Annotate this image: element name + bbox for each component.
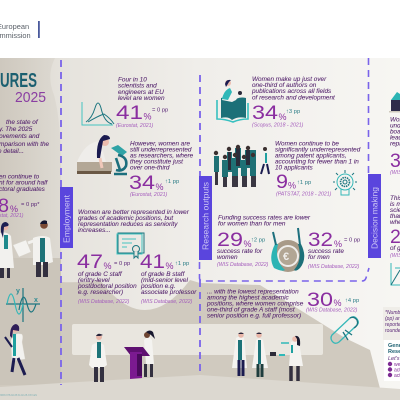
block: success rate men: success rate [308, 248, 344, 255]
block: authors: (Scopus, 2018 - 2021) [252, 122, 304, 128]
block: researchers one-third: (Eurostat, 2021) [130, 192, 167, 198]
block: grade C staff: % [104, 261, 112, 271]
block: grade A statistic: % [334, 298, 342, 308]
tab: Decision making: Decision making [370, 187, 380, 249]
block: success rate men: 32 [308, 229, 333, 251]
block: success rate men: % [334, 239, 342, 249]
icon: light bulb with gear [333, 170, 357, 195]
icon: certificate [117, 233, 144, 258]
block: researchers one-third: they constitute just [130, 158, 183, 166]
block: four in 10 scientists: Four in 10 [118, 76, 147, 84]
block: authors: % [278, 112, 287, 122]
icon: diploma [331, 317, 358, 343]
block: funding intro: for women than for men [218, 220, 286, 228]
block: seniority intro: representation reduces as seniority [78, 221, 178, 228]
block: grade C staff: (WIS Database, 2022) [78, 299, 130, 305]
block: grade B staff: of grade B staff [141, 271, 186, 278]
tab: Research outputs [199, 176, 212, 260]
block: success rate women: (WIS Database, 2022) [217, 262, 269, 268]
block: four in 10 scientists: (Eurostat, 2021) [116, 123, 153, 129]
block: four in 10 scientists: = 0 pp [152, 108, 168, 114]
contact box: Let's [388, 356, 400, 362]
icon: sine graph: x [34, 297, 38, 304]
block: funding intro [218, 214, 311, 228]
block: grade B staff [140, 251, 197, 305]
block: success rate men [308, 229, 360, 270]
block: patents [275, 140, 361, 198]
block: success rate men: for men [308, 254, 330, 261]
illustration: woman with tablet [5, 324, 25, 375]
dashed frame: employment [61, 60, 200, 385]
statistic: doctoral graduates: nt for around half [0, 180, 49, 186]
title [0, 70, 46, 106]
block: authors: publications across all fields [251, 88, 332, 95]
dashed frame: research outputs [200, 58, 369, 281]
tab: Research outputs: Research outputs [202, 182, 210, 250]
illustration: group of researchers [214, 145, 270, 187]
block: researchers one-third: % [156, 182, 164, 192]
block: seniority intro [78, 209, 190, 234]
block: grade B staff: % [166, 261, 174, 271]
icon: woman with book [217, 80, 248, 122]
statistic: doctoral graduates: ctoral graduates [0, 186, 46, 193]
block: grade C staff: 47 [77, 251, 103, 273]
block: grade B staff: (WIS Database, 2022) [141, 299, 193, 305]
block: patents: 9 [276, 171, 288, 193]
block: grade A statistic: (WIS Database, 2022) [306, 308, 358, 314]
block: patents: among patent applicants, [275, 152, 347, 160]
block: success rate women: % [244, 239, 252, 249]
catalogue number: ISBN 978-92-68 KI-02-25-XXX-EN [0, 393, 37, 397]
block: researchers one-third: over one-third [130, 164, 170, 172]
block: grade C staff: e.g. researcher) [78, 289, 123, 296]
block: grade A staff text: positions, where women comprise [206, 300, 304, 308]
block: researchers one-third [129, 140, 194, 198]
illustration: man in lab coat [89, 334, 107, 382]
intro text: mparison with the [0, 141, 50, 148]
block: grade C staff [77, 251, 137, 305]
block: four in 10 scientists: engineers at EU [118, 89, 164, 96]
contact box [384, 340, 400, 381]
block: success rate women: success rate for [217, 248, 263, 255]
illustration: two men and woman with device [232, 332, 303, 381]
icon: distribution chart [82, 102, 114, 125]
statistic: doctoral graduates: = 0 pp* [21, 202, 40, 208]
block: success rate women [217, 229, 269, 268]
block: authors: ↑3 pp [286, 109, 300, 115]
title: 2025 [15, 89, 46, 106]
block: grade A staff text: among the highest academic [207, 294, 290, 302]
footnote box [383, 307, 400, 340]
statistic: doctoral graduates: % [10, 204, 18, 214]
block: patents: Women continue to be [275, 140, 339, 148]
illustration: woman at microscope [77, 135, 127, 174]
right panel text: science [390, 195, 400, 259]
right panel icon: mountain [389, 92, 400, 112]
block: four in 10 scientists: level are women [118, 95, 165, 102]
block: grade B staff: ↑1 pp [175, 261, 189, 267]
block: grade A staff text: senior position e.g. full professor) [207, 312, 301, 320]
block: grade C staff: = 0 pp [114, 261, 130, 267]
block: funding intro: Funding success rates are lower [218, 214, 311, 222]
block: authors: Women make up just over [252, 76, 327, 83]
block: grade C staff: postdoctoral position [77, 283, 137, 290]
block: grade C staff: of grade C staff [78, 271, 123, 278]
block: grade A staff text [206, 288, 304, 320]
block: authors [251, 76, 335, 128]
block: success rate women: 29 [217, 229, 243, 251]
intro text [0, 119, 50, 155]
block: grade C staff: (entry-level [78, 277, 110, 284]
block: success rate men: = 0 pp [344, 238, 360, 244]
statistic: doctoral graduates [0, 174, 49, 219]
statistic: doctoral graduates: en continue to [0, 174, 40, 180]
block: four in 10 scientists: scientists and [118, 82, 157, 90]
block: four in 10 scientists [116, 76, 168, 129]
block: seniority intro: grades of academic positions, but [78, 215, 173, 222]
title: URES [0, 70, 37, 92]
block: success rate men: (WIS Database, 2022) [308, 264, 360, 270]
header band [0, 0, 400, 58]
icon: euro coin with arms: € [283, 251, 289, 263]
block: seniority intro: Women are better represented in lower [78, 209, 190, 216]
block: grade B staff: associate professor [141, 289, 197, 296]
block: researchers one-third: still underrepresented [130, 146, 192, 154]
block: researchers one-third: as researchers, where [130, 152, 194, 160]
block: patents: % [288, 180, 296, 190]
icon: sine graph: y [16, 288, 20, 295]
block: seniority intro: increases... [78, 227, 111, 234]
block: researchers one-third: However, women are [130, 140, 190, 148]
block: researchers one-third: 34 [129, 172, 155, 194]
block: grade A staff text: ... with the lowest representation [207, 288, 299, 296]
block: grade B staff: position e.g. [140, 283, 175, 290]
block: patents: accounting for fewer than 1 in [275, 158, 359, 166]
intro text: the state of [6, 119, 39, 126]
block: researchers one-third: ↑1 pp [165, 179, 179, 185]
block: patents: 10 applicants [275, 164, 313, 172]
block: four in 10 scientists: 41 [116, 102, 143, 124]
logo: European Commission [0, 21, 40, 40]
block: success rate women: ↑2 pp [251, 238, 265, 244]
tab: Employment: Employment [62, 194, 72, 243]
illustration: woman at podium [124, 330, 155, 379]
block: grade A statistic: ↑4 pp [345, 298, 359, 304]
block: patents: (PATSTAT, 2018 - 2021) [276, 192, 332, 198]
block: authors: one-third of authors on [252, 82, 317, 89]
block: authors: 34 [252, 102, 278, 124]
tab: Decision making [368, 174, 381, 258]
illustration: two researchers with document [0, 220, 53, 278]
icon: euro coin with arms [271, 228, 304, 272]
block: patents: significantly underrepresented [275, 146, 361, 154]
block: grade A statistic: 30 [307, 289, 333, 311]
block: grade B staff: (mid-senior level [141, 277, 188, 284]
block: grade A statistic [306, 289, 359, 314]
block: patents: ↑1 pp [297, 180, 311, 186]
block: success rate women: women [217, 254, 238, 261]
block: authors: of research and development [252, 94, 335, 102]
right panel icon [391, 263, 400, 285]
icon: sine graph [6, 288, 40, 322]
right panel text: board leaders [390, 116, 400, 176]
block: grade B staff: 41 [140, 251, 165, 273]
block: grade A staff text: one-third of grade A staff (most [207, 306, 295, 314]
tab: Employment [60, 187, 73, 248]
block: four in 10 scientists: % [144, 112, 152, 122]
